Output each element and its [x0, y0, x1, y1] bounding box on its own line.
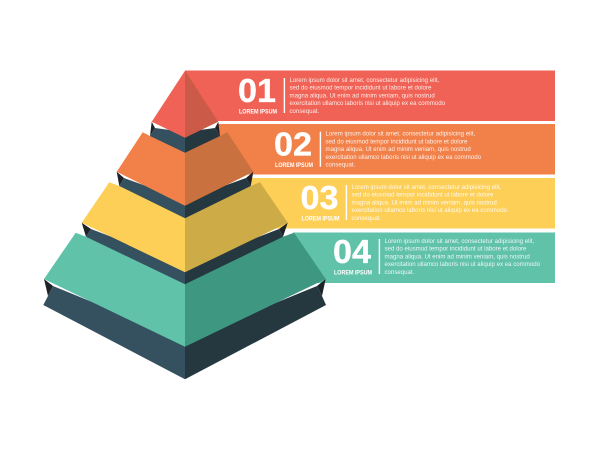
- text block 02: exercitation ullamco laboris nisi ut aliquip ex ea commodo: [326, 154, 482, 161]
- text block 03: Lorem ipsum dolor sit amet, consectetur adipisicing elit,: [352, 184, 502, 191]
- label 02: LOREM IPSUM: [275, 162, 313, 169]
- text block 01: Lorem ipsum dolor sit amet, consectetur adipisicing elit,: [290, 77, 440, 84]
- divider 03: [346, 185, 347, 220]
- number 04: 04: [333, 233, 372, 270]
- text block 01: magna aliqua. Ut enim ad minim veniam, quis nostrud: [290, 92, 435, 99]
- number 01: 01: [238, 72, 276, 109]
- text block 04: consequat.: [384, 269, 415, 276]
- text block 01: consequat.: [290, 108, 320, 115]
- text block 02: Lorem ipsum dolor sit amet, consectetur adipisicing elit,: [326, 131, 476, 138]
- panel: row 03: [250, 178, 555, 228]
- text block 04: Lorem ipsum dolor sit amet, consectetur adipisicing elit,: [384, 238, 535, 245]
- text block 03: sed do eiusmod tempor incididunt ut labore et dolore: [352, 192, 494, 199]
- panel: row 02: [218, 124, 555, 174]
- text block 02: sed do eiusmod tempor incididunt ut labore et dolore: [326, 138, 468, 145]
- text block 01: [290, 77, 446, 115]
- text block 03: exercitation ullamco laboris nisi ut aliquip ex ea commodo: [352, 207, 508, 214]
- tier 3: yellow: [82, 182, 288, 284]
- text block 02: consequat.: [326, 162, 356, 168]
- text block 03: magna aliqua. Ut enim ad minim veniam, quis nostrud: [352, 199, 497, 206]
- panel: row 04: [293, 232, 555, 283]
- text block 04: sed do eiusmod tempor incididunt ut labore et dolore: [384, 246, 527, 253]
- text block 03: consequat.: [352, 215, 382, 222]
- label 03: LOREM IPSUM: [302, 216, 340, 222]
- tier 4: teal base: [43, 233, 326, 379]
- tier 2: orange: [117, 132, 253, 218]
- text block 01: exercitation ullamco laboris nisi ut aliquip ex ea commodo: [290, 100, 446, 107]
- tier 1: red apex: [150, 71, 220, 153]
- text block 02: magna aliqua. Ut enim ad minim veniam, quis nostrud: [326, 146, 471, 153]
- text block 04: magna aliqua. Ut enim ad minim veniam, quis nostrud: [384, 253, 530, 260]
- number 02: 02: [274, 126, 312, 163]
- label 01: LOREM IPSUM: [239, 108, 277, 116]
- label 04: LOREM IPSUM: [334, 270, 372, 276]
- text block 04: exercitation ullamco laboris nisi ut aliquip ex ea commodo: [384, 261, 541, 268]
- text block 02: [326, 131, 482, 168]
- text block 04: [384, 238, 541, 276]
- number 03: 03: [300, 179, 338, 216]
- divider 02: [320, 132, 321, 167]
- pyramid: [43, 71, 326, 379]
- panel: row 01: [185, 70, 555, 121]
- divider 04: [379, 239, 380, 274]
- divider 01: [284, 78, 285, 113]
- text block 03: [352, 184, 508, 222]
- text block 01: sed do eiusmod tempor incididunt ut labore et dolore: [290, 85, 432, 92]
